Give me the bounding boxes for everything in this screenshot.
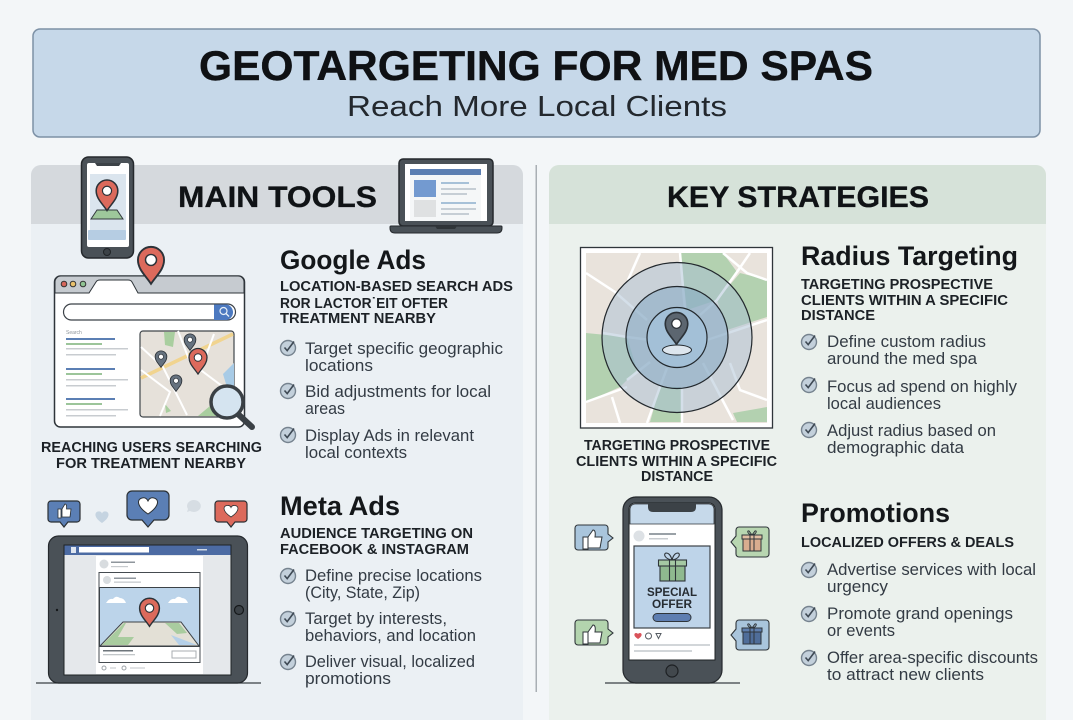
subheading: google ads: TREATMENT NEARBY [280,311,436,327]
caption: google ads illustration: REACHING USERS SEARCHING [41,440,262,456]
caption: radius map: TARGETING PROSPECTIVE [584,438,770,454]
bullet list: radius targeting [802,332,1017,457]
subheading: radius targeting: CLIENTS WITHIN A SPECIFIC [801,293,1009,309]
icon: laptop [390,159,502,233]
bullet list: radius targeting: local audiences [827,394,941,413]
caption: radius map: CLIENTS WITHIN A SPECIFIC [576,454,778,470]
bullet list: meta ads: behaviors, and location [305,626,476,645]
bullet list: promotions: Promote grand openings [827,604,1013,623]
icon: location pin [665,312,688,344]
section: meta ads [280,491,482,688]
illustration: browser search with map: Search [66,330,82,336]
bullet list: meta ads: (City, State, Zip) [305,583,420,602]
section: radius targeting [801,241,1018,457]
bullet list: promotions: Advertise services with local [827,560,1036,579]
icon: like bubble top left [575,525,613,550]
icon: smartphone with pin [82,157,134,258]
section: promotions [801,498,1038,684]
section: google ads [280,245,513,462]
title banner [33,29,1040,137]
icon: like bubble bottom left [575,620,613,645]
bullet list: promotions [802,560,1038,684]
subheading: meta ads: FACEBOOK & INSTAGRAM [280,542,469,558]
heading: meta ads: Meta Ads [280,491,400,521]
bullet list: promotions: urgency [827,577,888,596]
subtitle: Reach More Local Clients [347,91,727,123]
label: special offer: SPECIAL [647,587,697,599]
bullet list: google ads: Display Ads in relevant [305,426,474,445]
bullet list: google ads: locations [305,356,373,375]
panel: key strategies [549,165,1046,720]
label: special offer: OFFER [652,599,693,611]
title: GEOTARGETING FOR MED SPAS [199,42,873,89]
bullet list: google ads [280,339,503,462]
bullet list: google ads: areas [305,399,345,418]
bullet list: meta ads [280,566,482,688]
bullet list: google ads: Bid adjustments for local [305,382,491,401]
subheading: google ads: LOCATION-BASED SEARCH ADS [280,279,513,295]
bullet list: google ads: Target specific geographic [305,339,503,358]
bullet list: promotions: Offer area-specific discounts [827,648,1038,667]
bullet list: meta ads: Define precise locations [305,566,482,585]
panel: main tools [31,157,523,720]
subheading: meta ads [280,526,473,558]
bullet list: radius targeting: Define custom radius [827,332,986,351]
subheading: radius targeting: TARGETING PROSPECTIVE [801,277,993,293]
subheading: meta ads: AUDIENCE TARGETING ON [280,526,473,542]
bullet list: promotions: or events [827,621,895,640]
bullet list: meta ads: Target by interests, [305,609,447,628]
illustration: phone with special offer [605,497,740,683]
heading: key strategies: KEY STRATEGIES [667,181,929,214]
radius rings [602,262,752,412]
icon: gift [658,553,686,581]
bullet list: radius targeting: demographic data [827,438,965,457]
subheading: radius targeting: DISTANCE [801,308,875,324]
caption: radius map: DISTANCE [641,469,713,485]
illustration: social reaction bubbles [48,491,247,527]
caption: google ads illustration [41,440,262,472]
bullet list: radius targeting: Focus ad spend on highly [827,377,1017,396]
subheading: promotions: LOCALIZED OFFERS & DEALS [801,535,1014,551]
icon: gift bubble bottom right [731,620,769,650]
caption: google ads illustration: FOR TREATMENT NEARBY [56,456,246,472]
icon: magnifier [211,386,252,427]
illustration: radius map [580,248,772,428]
illustration: browser search with map [54,247,252,427]
caption: radius map [576,438,778,485]
icon: gift bubble top right [731,527,769,557]
bullet list: promotions: to attract new clients [827,665,984,684]
heading: google ads: Google Ads [280,245,426,275]
icon: red pin [138,247,164,284]
heading: radius targeting: Radius Targeting [801,241,1018,271]
heading: promotions: Promotions [801,498,950,528]
illustration: tablet with facebook post [36,536,261,683]
bullet list: meta ads: promotions [305,669,391,688]
map panel [140,331,234,417]
label: special offer [647,587,697,611]
heading: main tools: MAIN TOOLS [178,181,377,214]
subheading: radius targeting [801,277,1009,324]
bullet list: radius targeting: Adjust radius based on [827,421,996,440]
subheading: google ads [280,279,513,327]
bullet list: meta ads: Deliver visual, localized [305,652,475,671]
subheading: google ads: ROR LACTOR˙EIT OFTER [280,296,448,312]
column divider [536,165,537,692]
bullet list: google ads: local contexts [305,443,407,462]
bullet list: radius targeting: around the med spa [827,349,978,368]
